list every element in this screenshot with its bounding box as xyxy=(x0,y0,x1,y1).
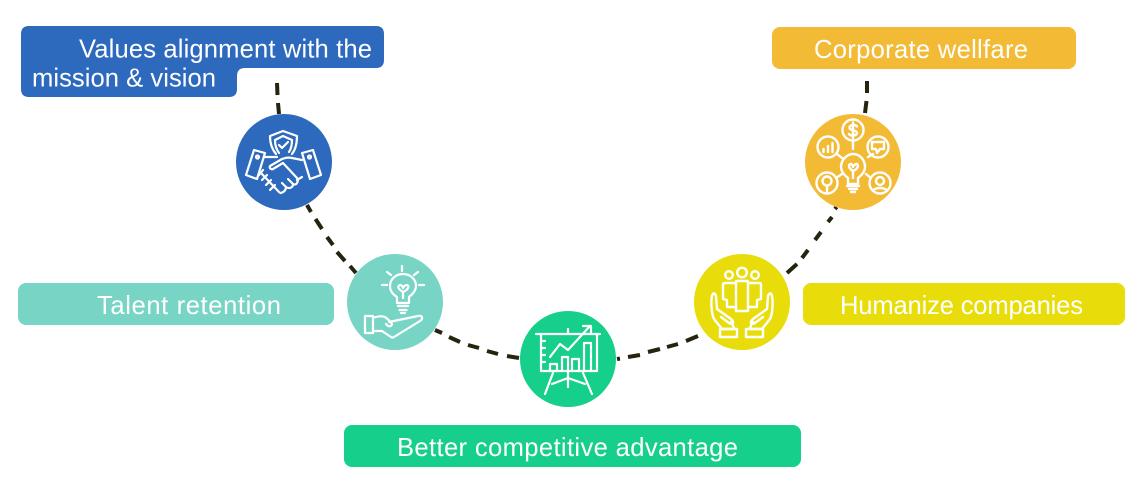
icon: bulb with surrounding ideas xyxy=(805,114,901,210)
icon: handshake with shield xyxy=(236,114,332,210)
icon: light bulb over hand xyxy=(347,254,443,350)
label: corporate wellfare: Corporate wellfare xyxy=(814,36,1028,64)
label: values alignment xyxy=(21,26,384,97)
dashed connecting curve xyxy=(277,81,867,359)
icon: presentation board with chart xyxy=(520,311,616,407)
label: humanize companies: Humanize companies xyxy=(840,292,1083,320)
label: corporate wellfare xyxy=(772,27,1076,69)
label: values alignment: mission & vision xyxy=(32,64,216,92)
label: humanize companies xyxy=(803,283,1125,325)
label: talent retention: Talent retention xyxy=(97,292,281,320)
icon: hands holding people xyxy=(694,254,790,350)
label: talent retention xyxy=(18,283,334,325)
label: better competitive advantage: Better competitive advantage xyxy=(397,434,738,462)
label: better competitive advantage xyxy=(344,425,801,467)
label: values alignment: Values alignment with the xyxy=(79,36,372,64)
